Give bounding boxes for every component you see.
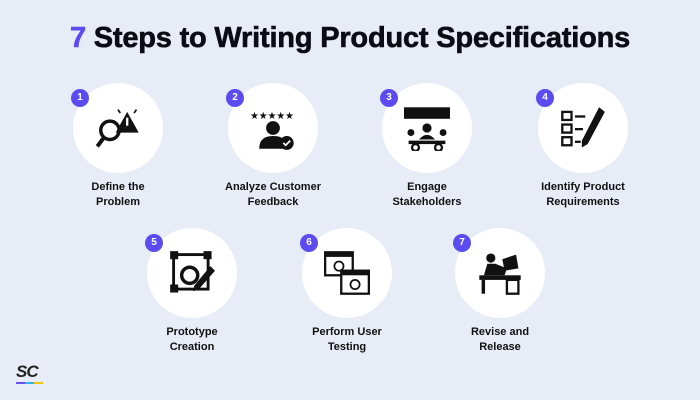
label: Revise and: [471, 326, 529, 338]
badge 3: 3: [386, 92, 392, 103]
badge 5: 5: [151, 237, 157, 248]
label: Feedback: [248, 196, 298, 208]
step 1: [71, 83, 163, 208]
circle: stakeholders icon: [382, 83, 472, 173]
step 5: [145, 228, 237, 353]
badge 6: 6: [306, 237, 312, 248]
label: Creation: [170, 341, 214, 353]
badge 6: [300, 234, 318, 252]
logo: SC: [16, 362, 38, 381]
title: 7 Steps to Writing Product Specifications: [70, 22, 630, 54]
label: [392, 181, 462, 208]
step 4: [536, 83, 628, 208]
badge 7: 7: [459, 237, 465, 248]
circle: feedback icon: ★★★★★: [250, 111, 294, 122]
label: Define the: [91, 181, 145, 193]
circle: feedback icon: [228, 83, 318, 173]
circle: release icon: [455, 228, 545, 318]
circle: define problem icon: [73, 83, 163, 173]
label: [312, 326, 382, 353]
step 2: [225, 83, 321, 208]
badge 3: [380, 89, 398, 107]
label: Analyze Customer: [225, 181, 321, 193]
badge 7: [453, 234, 471, 252]
badge 2: [226, 89, 244, 107]
label: [471, 326, 529, 353]
label: Testing: [328, 341, 366, 353]
step 6: [300, 228, 392, 353]
step 3: [380, 83, 472, 208]
badge 1: 1: [77, 92, 83, 103]
label: Perform User: [312, 326, 382, 338]
badge 2: 2: [232, 92, 238, 103]
label: Release: [479, 341, 521, 353]
label: Prototype: [166, 326, 218, 338]
label: [91, 181, 145, 208]
label: Engage: [407, 181, 447, 193]
label: [541, 181, 625, 208]
label: Identify Product: [541, 181, 625, 193]
label: [225, 181, 321, 208]
label: Stakeholders: [392, 196, 462, 208]
badge 4: [536, 89, 554, 107]
step 7: [453, 228, 545, 353]
badge 4: 4: [542, 92, 548, 103]
label: Requirements: [546, 196, 620, 208]
circle: user testing icon: [302, 228, 392, 318]
circle: prototype icon: [147, 228, 237, 318]
badge 1: [71, 89, 89, 107]
circle: requirements icon: [538, 83, 628, 173]
badge 5: [145, 234, 163, 252]
label: Problem: [96, 196, 140, 208]
label: [166, 326, 218, 353]
